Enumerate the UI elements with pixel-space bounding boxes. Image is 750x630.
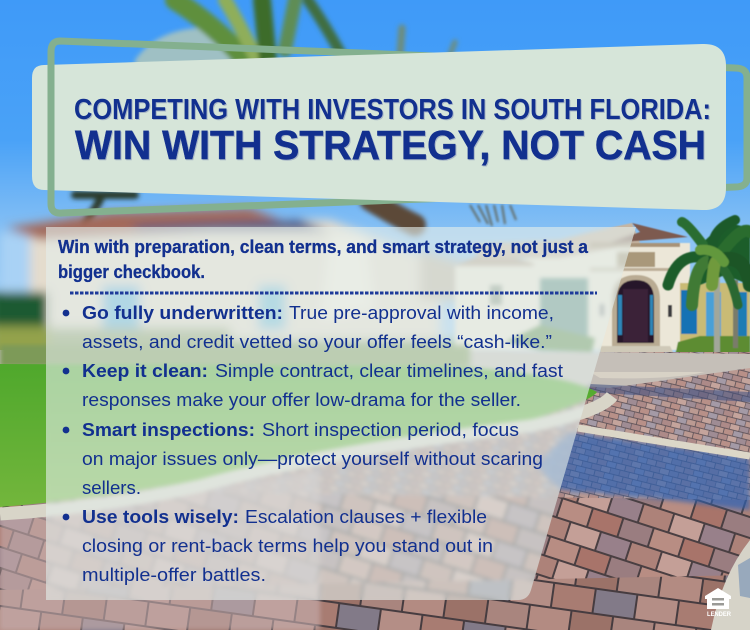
driveway pavers <box>0 352 750 630</box>
icon: equal housing lender: LENDER <box>707 612 732 618</box>
translucent text panel <box>46 227 636 600</box>
bullet: keep it clean: Keep it clean: <box>82 360 208 381</box>
blurred foreground pavers at left <box>0 470 320 630</box>
icon: equal housing lender <box>705 588 732 618</box>
curb around lawn <box>0 396 612 514</box>
intro text: Win with preparation, clean terms, and smart strategy, not just a <box>58 236 589 257</box>
bullet: smart inspections: on major issues only—protect yourself without scaring <box>82 448 543 469</box>
bullet: use tools wisely: Escalation clauses + flexible <box>245 506 487 527</box>
bullet: use tools wisely <box>63 506 493 585</box>
bullet: go fully underwritten: True pre-approval with income, <box>289 302 554 323</box>
bullet: go fully underwritten <box>63 302 554 352</box>
bullet: smart inspections: Short inspection period, focus <box>262 419 519 440</box>
curb lines <box>578 428 750 456</box>
intro text: bigger checkbook. <box>58 261 205 282</box>
hedge above lawn <box>0 345 470 367</box>
banner shape <box>32 44 726 210</box>
sharp house <box>455 223 750 357</box>
bullet: keep it clean: responses make your offer low-drama for the seller. <box>82 389 521 410</box>
bullet: go fully underwritten: assets, and credit vetted so your offer feels “cash-like.” <box>82 331 552 352</box>
light entry paving <box>0 350 750 388</box>
driveway shadow <box>535 432 750 510</box>
title <box>74 94 711 168</box>
bullet: smart inspections <box>63 419 543 498</box>
blurred left part of house <box>0 208 470 370</box>
bullet: smart inspections: sellers. <box>82 477 141 498</box>
green frame left edge <box>48 60 54 200</box>
divider <box>70 292 597 294</box>
title: WIN WITH STRATEGY, NOT CASH <box>75 122 706 168</box>
bullet: use tools wisely: Use tools wisely: <box>82 506 239 527</box>
side walkway <box>711 540 750 630</box>
grass lawn <box>0 364 597 507</box>
bullet: smart inspections: Smart inspections: <box>82 419 255 440</box>
intro text <box>58 236 589 282</box>
green frame behind banner <box>51 41 747 213</box>
bullet: go fully underwritten: Go fully underwritten: <box>82 302 283 323</box>
blurred palm at top <box>75 0 455 225</box>
bullet: keep it clean <box>63 360 563 410</box>
bullet: use tools wisely: multiple-offer battles. <box>82 564 266 585</box>
bullet: keep it clean: Simple contract, clear timelines, and fast <box>215 360 563 381</box>
palm tree at right <box>668 220 750 305</box>
bullet: use tools wisely: closing or rent-back terms help you stand out in <box>82 535 493 556</box>
